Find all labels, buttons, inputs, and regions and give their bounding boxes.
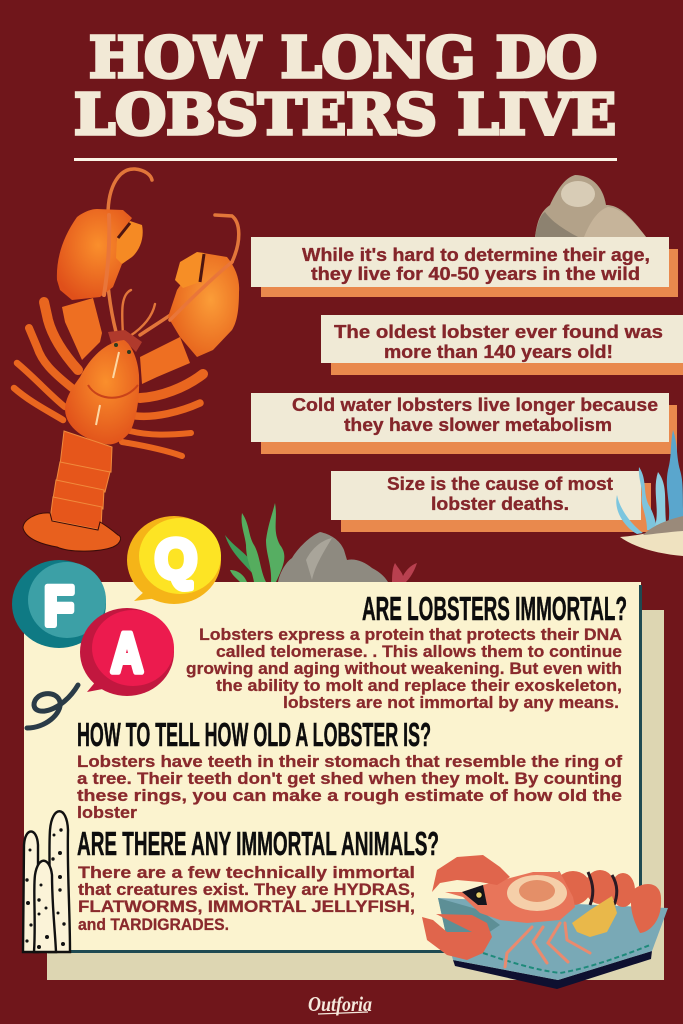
info bar 1 (251, 237, 678, 297)
icon: Q speech bubble (127, 516, 221, 604)
icon: F speech bubble: F (44, 574, 74, 637)
illustration: blue seaweed and sand (616, 430, 683, 556)
FAQ answer 1 (186, 625, 622, 712)
info bar 3: Cold water lobsters live longer because (292, 395, 658, 415)
illustration: rocks (535, 175, 646, 237)
legs (505, 923, 590, 967)
carapace (65, 340, 139, 444)
info bar 4: Size is the cause of most (387, 474, 613, 494)
FAQ answer 1: the ability to molt and replace their exoskeleton, (216, 676, 622, 695)
left claw finger (114, 221, 143, 264)
FAQ answer 1: growing and aging without weakening. But even with (186, 659, 622, 678)
FAQ answer 2: Lobsters have teeth in their stomach that resemble the ring of (77, 752, 622, 771)
illustration: lobster on plate (422, 855, 668, 989)
lower claw (422, 914, 492, 960)
icon: F speech bubble (12, 560, 106, 648)
plate underside (453, 951, 652, 989)
head joints (108, 330, 142, 352)
FAQ answer 2 (77, 752, 622, 822)
info bar 4: lobster deaths. (431, 494, 569, 514)
left legs (14, 302, 78, 420)
right claw finger (175, 252, 204, 288)
logo: Outforia (308, 992, 372, 1016)
panel shadow (47, 610, 664, 980)
antenna over claws (104, 215, 232, 320)
FAQ answer 2: these rings, you can make a rough estimate of how old the (77, 786, 622, 805)
illustration: cacti (23, 811, 70, 952)
info bar 3 (251, 393, 677, 454)
tail fan (23, 513, 121, 551)
FAQ answer 3 (78, 863, 415, 934)
title: HOW LONG DO (89, 25, 597, 91)
FAQ answer 3: that creatures exist. They are HYDRAS, (78, 880, 415, 899)
info bar 3: they have slower metabolism (344, 415, 612, 435)
FAQ answer 2: lobster (77, 803, 137, 822)
info bar 2: more than 140 years old! (384, 342, 613, 362)
title (74, 25, 616, 148)
icon: A speech bubble: A (111, 621, 143, 684)
plate pattern (483, 945, 650, 973)
right claw arm (140, 337, 190, 384)
info bar 4 (331, 471, 651, 532)
tail segments (555, 870, 661, 933)
FAQ answer 1: called telomerase. . This allows them to continue (216, 642, 622, 661)
icon: Q speech bubble: Q (155, 527, 197, 590)
info bar 1: they live for 40-50 years in the wild (311, 264, 640, 284)
FAQ answer 1: lobsters are not immortal by any means. (283, 693, 619, 712)
right claw palm (168, 253, 239, 357)
icon: squiggle (27, 685, 78, 728)
info bar 2 (321, 315, 683, 375)
eyes (114, 343, 118, 347)
lemon (572, 896, 617, 937)
illustration: seaweed and rock (225, 503, 417, 582)
info bar 2: The oldest lobster ever found was (334, 322, 663, 342)
plate (438, 898, 668, 980)
FAQ answer 1: Lobsters express a protein that protects their DNA (199, 625, 622, 644)
body (445, 872, 575, 923)
left claw palm (57, 209, 132, 300)
eye (462, 885, 487, 905)
icon: A speech bubble (80, 608, 174, 696)
FAQ answer 3: FLATWORMS, IMMORTAL JELLYFISH, (78, 897, 415, 916)
right legs (122, 374, 203, 456)
left claw arm (62, 298, 102, 360)
FAQ answer 3: and TARDIGRADES. (78, 915, 229, 934)
FAQ answer 2: a tree. Their teeth don't get shed when they molt. By counting (77, 769, 622, 788)
illustration: lobster (14, 169, 239, 551)
title: LOBSTERS LIVE (74, 82, 616, 148)
antennae (106, 169, 239, 336)
FAQ answer 3: There are a few technically immortal (78, 863, 415, 882)
upper claw (432, 855, 510, 892)
FAQ panel (24, 582, 642, 953)
info bar 1: While it's hard to determine their age, (302, 245, 650, 265)
tail (50, 431, 112, 530)
